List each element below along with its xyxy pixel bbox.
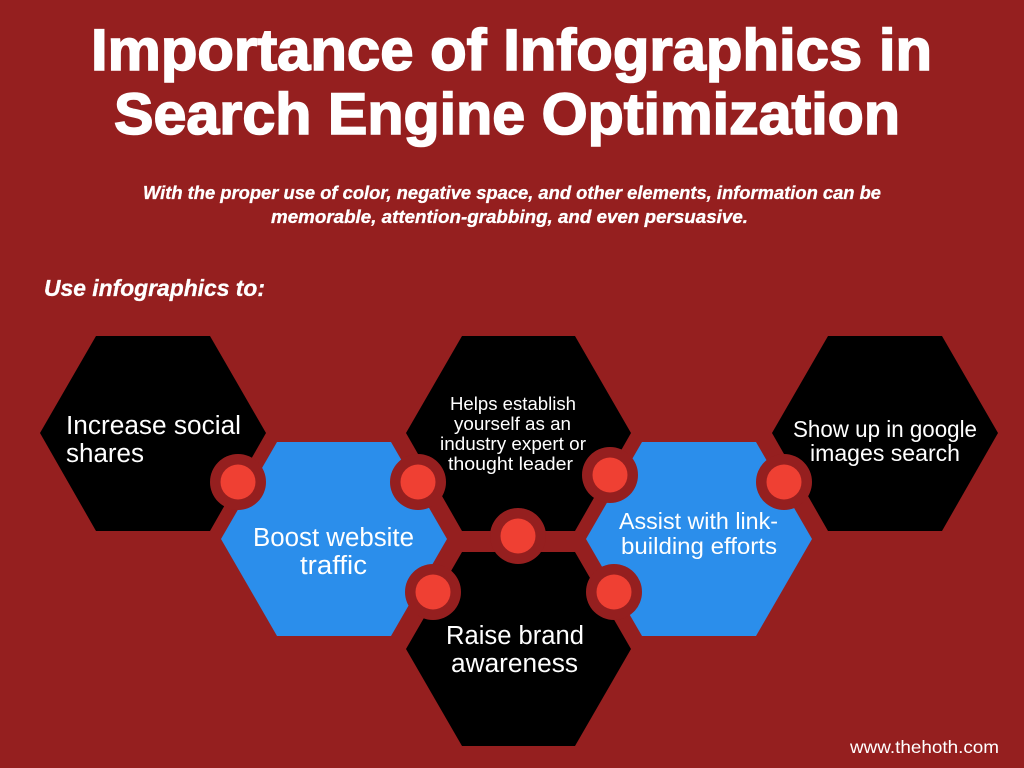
hexagon: increase social shares bbox=[40, 336, 266, 531]
hexagon: industry expert: yourself as an bbox=[454, 413, 571, 434]
hexagon: industry expert: Helps establish bbox=[450, 393, 576, 414]
hexagon: boost website traffic: Boost website bbox=[253, 524, 414, 552]
hexagon: google images: images search bbox=[810, 440, 960, 466]
hexagon: industry expert: industry expert or bbox=[440, 433, 586, 454]
hexagon: link-building bbox=[586, 442, 812, 636]
hexagon: google images bbox=[772, 336, 998, 531]
hexagon: boost website traffic: traffic bbox=[300, 552, 367, 580]
section heading: Use infographics to: bbox=[44, 275, 265, 301]
title bbox=[91, 18, 932, 147]
title: Search Engine Optimization bbox=[114, 82, 900, 147]
subtitle text bbox=[143, 183, 881, 227]
hexagon: increase social shares: shares bbox=[66, 440, 144, 468]
hexagon: industry expert bbox=[406, 336, 631, 531]
hexagon: boost website traffic bbox=[221, 442, 447, 636]
hexagon: increase social shares: Increase social bbox=[66, 412, 241, 440]
hexagon: link-building: building efforts bbox=[621, 533, 777, 559]
subtitle text: With the proper use of color, negative space, and other elements, information can be bbox=[143, 183, 881, 203]
hexagon: raise brand awareness: Raise brand bbox=[446, 622, 584, 650]
hexagon: industry expert: thought leader bbox=[448, 453, 573, 474]
hexagon: link-building: Assist with link- bbox=[619, 508, 778, 534]
hexagon: raise brand awareness: awareness bbox=[451, 650, 578, 678]
subtitle text: memorable, attention-grabbing, and even persuasive. bbox=[271, 207, 748, 227]
hexagon: google images: Show up in google bbox=[793, 416, 977, 442]
title: Importance of Infographics in bbox=[91, 18, 932, 83]
hexagon: raise brand awareness bbox=[406, 552, 631, 746]
connector dots bbox=[210, 447, 812, 620]
website footer: www.thehoth.com bbox=[849, 737, 999, 757]
